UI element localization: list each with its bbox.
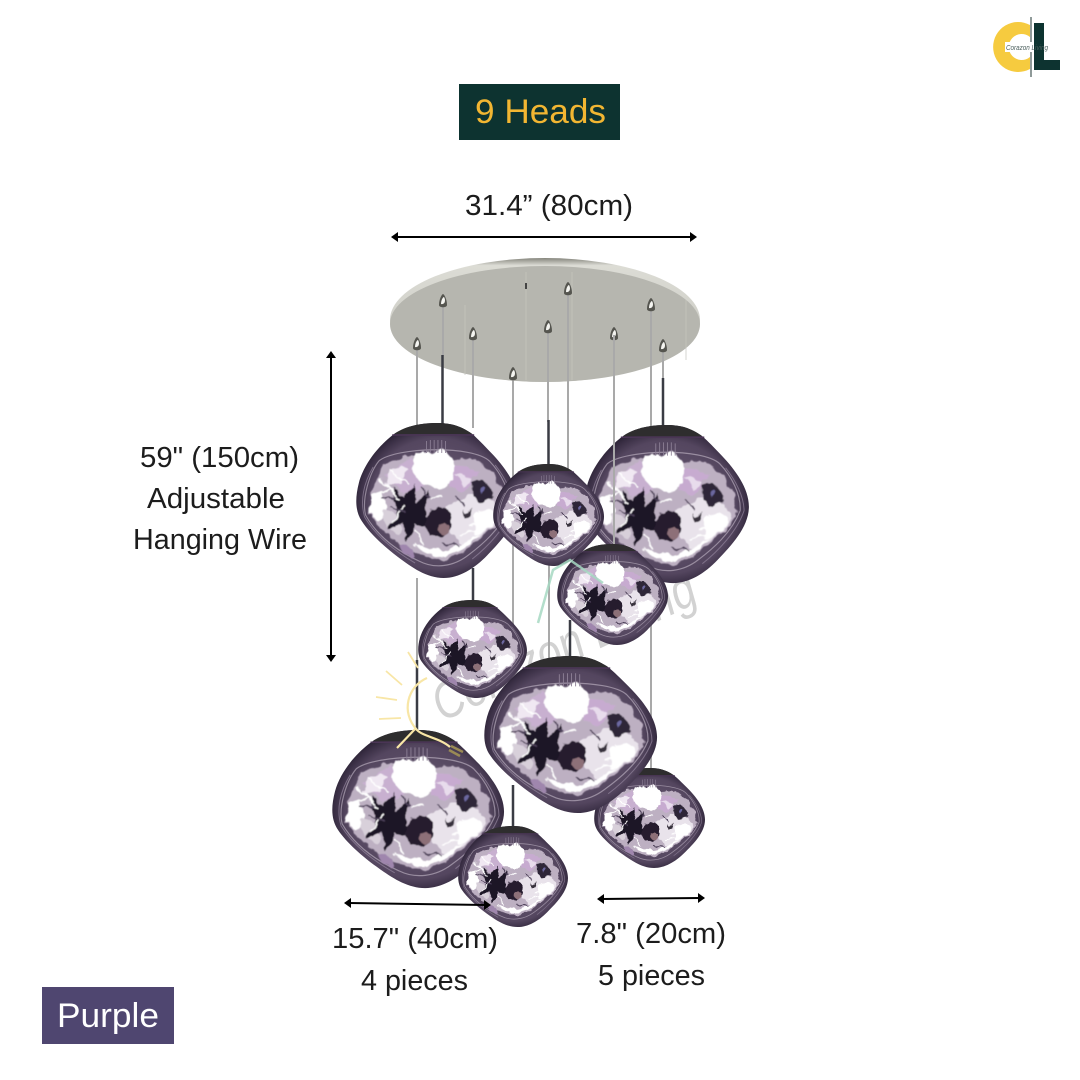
- lamp: large centre: [484, 656, 657, 813]
- ceiling plate: [390, 258, 700, 382]
- logo: Corazon Living: Corazon Living: [1006, 45, 1048, 52]
- colour label: Purple: Purple: [57, 997, 159, 1035]
- lamp: small right: [557, 544, 668, 645]
- diameter dimension: 15.7 inch: 4 pieces: [361, 965, 468, 997]
- height dimension: hanging wire: Hanging Wire: [133, 524, 307, 556]
- diameter dimension: 7.8 inch: 7.8" (20cm): [576, 918, 726, 950]
- wire over lamp: [613, 335, 615, 546]
- ceiling hooks: [413, 282, 667, 380]
- watermark: green house mark: [538, 560, 603, 623]
- lamp: small lower right: [594, 768, 705, 868]
- lamp: small left: [418, 600, 527, 698]
- heading: 9 Heads: 9 Heads: [475, 93, 606, 131]
- heading: 9 Heads: [459, 84, 620, 140]
- lamp: large upper left: [356, 423, 518, 578]
- diameter dimension: 15.7 inch: 15.7" (40cm): [332, 923, 498, 955]
- diameter dimension: 7.8 inch: [576, 893, 726, 992]
- height dimension: hanging wire: 59" (150cm): [140, 442, 299, 474]
- diameter dimension: 15.7 inch: [332, 898, 498, 997]
- logo: Corazon Living: [993, 17, 1060, 77]
- lamp: large upper right: [584, 425, 749, 583]
- lamp: small top centre: [493, 464, 604, 566]
- height dimension: hanging wire: [133, 351, 336, 662]
- lamp: small bottom centre: [458, 826, 568, 927]
- height dimension: hanging wire: Adjustable: [147, 483, 285, 515]
- watermark: bulb: [376, 652, 463, 756]
- width dimension: 31.4 inch: 31.4” (80cm): [465, 190, 633, 222]
- width dimension: 31.4 inch: [391, 190, 697, 242]
- lamp: large lower left: [332, 730, 504, 888]
- hanging wires: [417, 290, 663, 828]
- colour label: Purple: [42, 987, 174, 1044]
- watermark text behind lamps: Corazon Living: [423, 560, 705, 733]
- diameter dimension: 7.8 inch: 5 pieces: [598, 960, 705, 992]
